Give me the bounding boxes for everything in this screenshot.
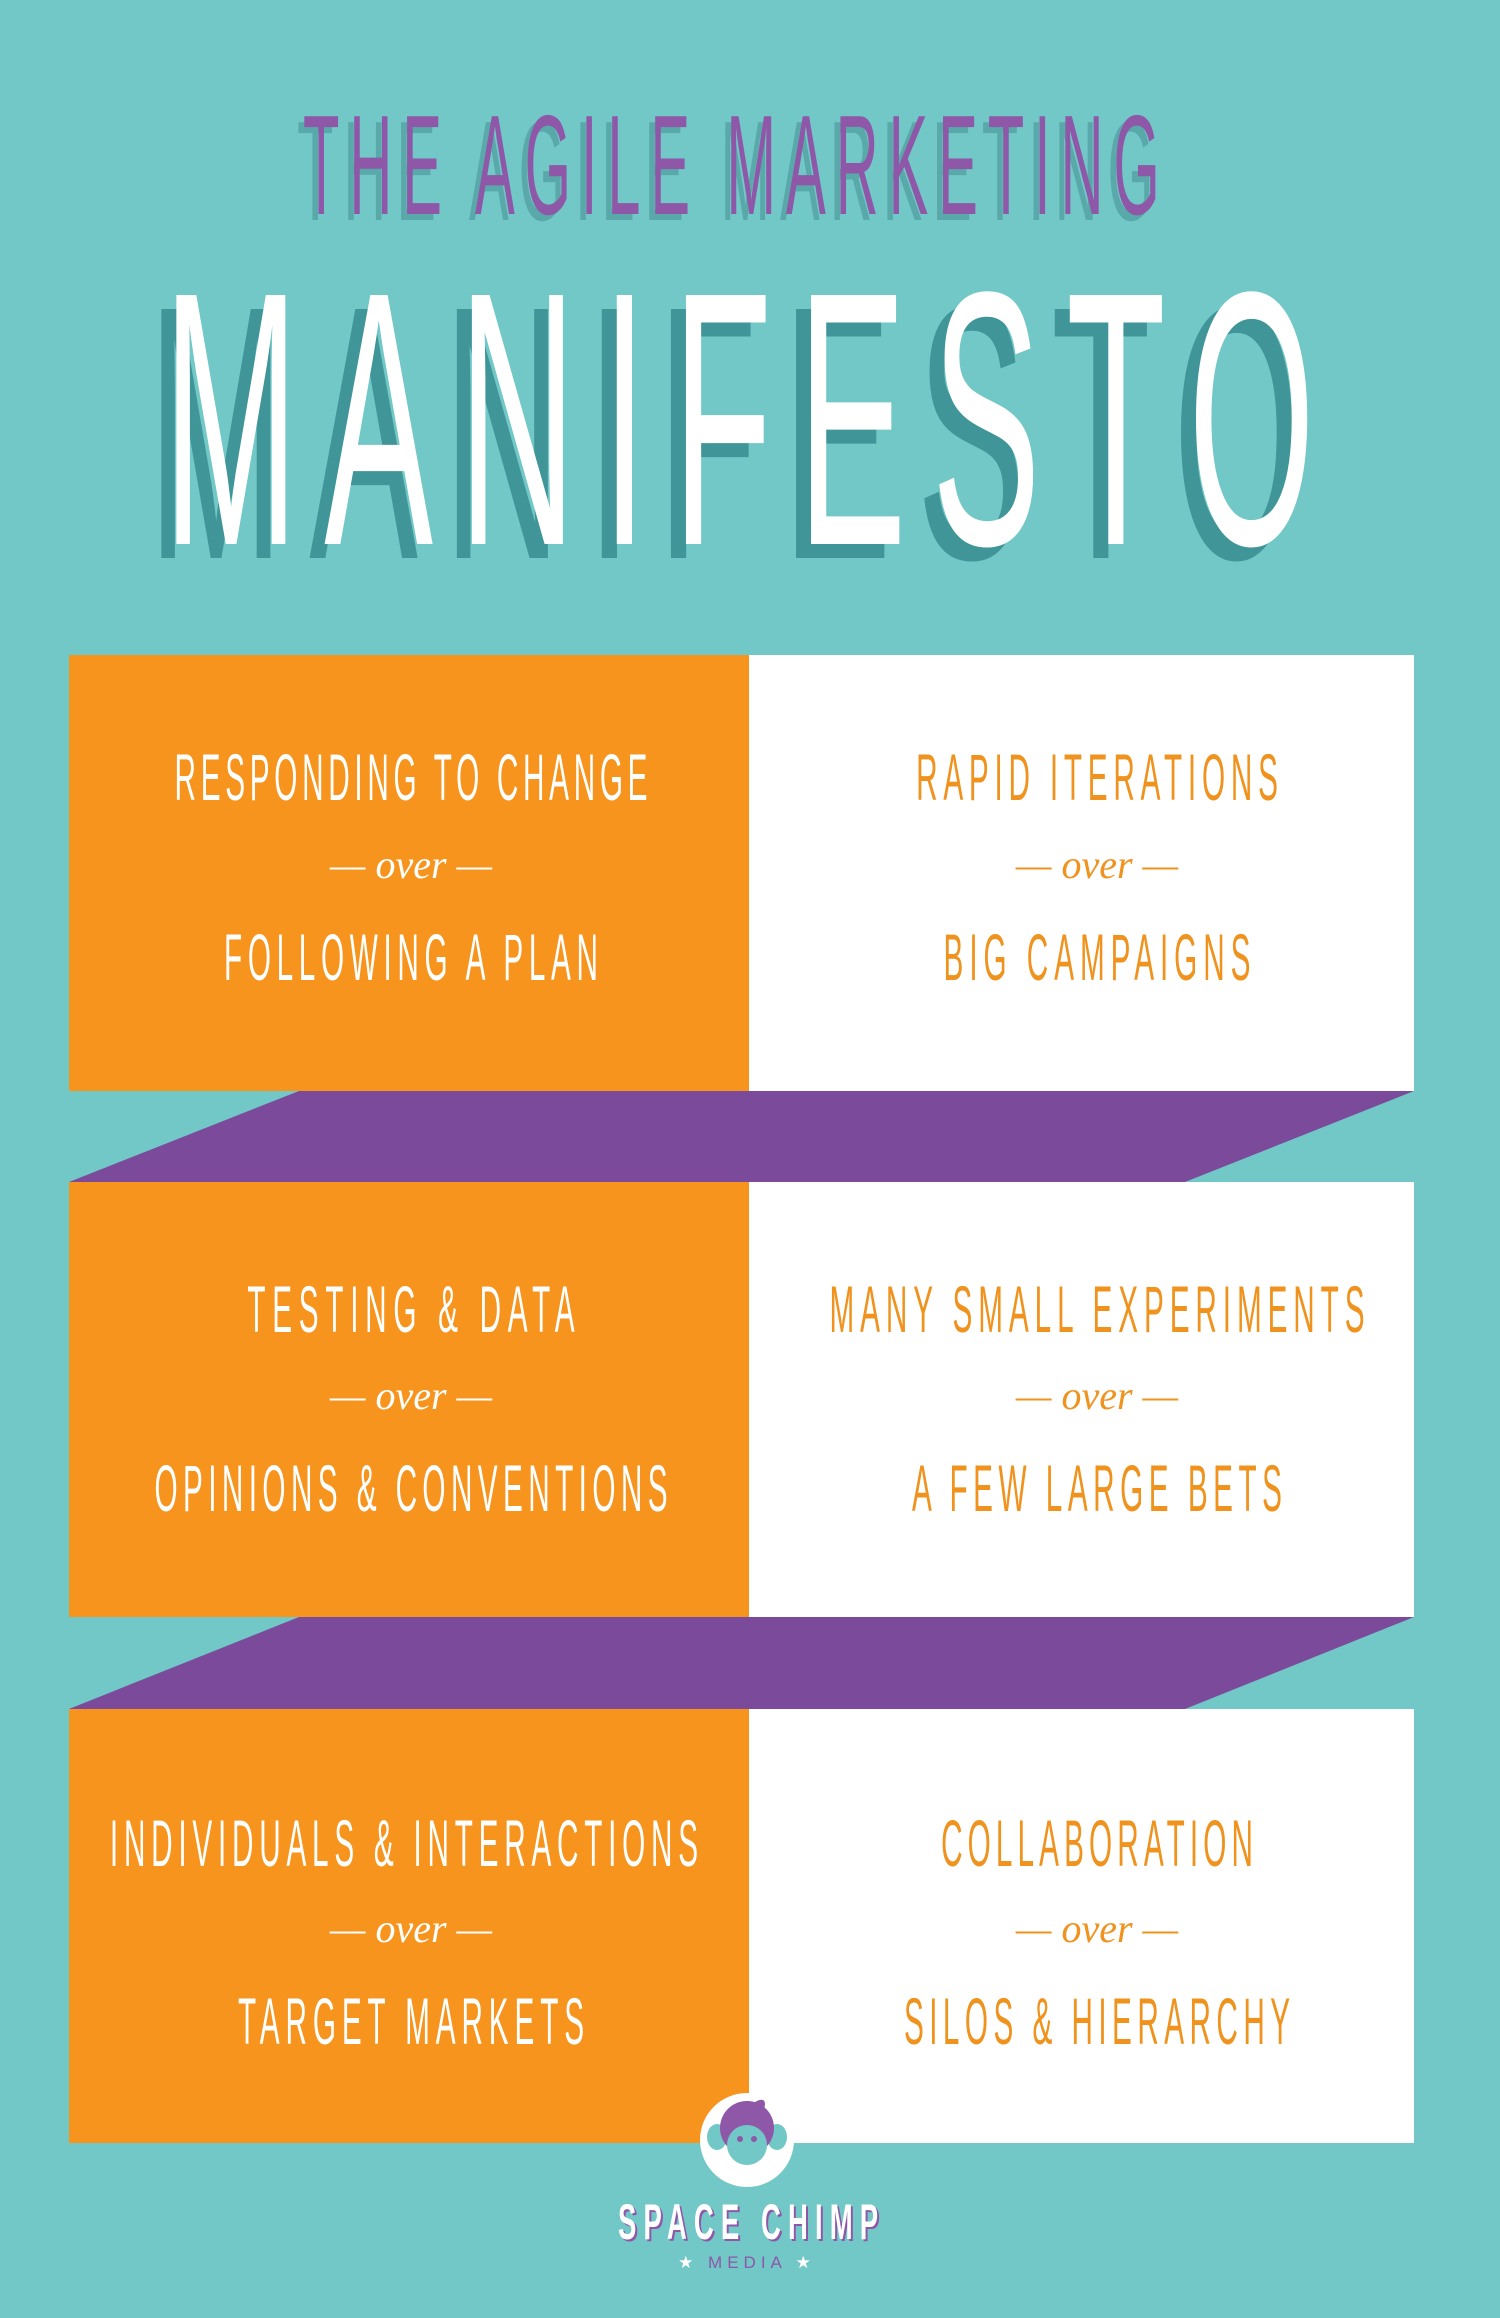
text: individuals & interactions over target markets: INDIVIDUALS & INTERACTIONS [110,1807,698,1880]
panel row 1 [69,655,1414,1091]
text: responding to change over following a plan: — over — [329,842,493,887]
text: many small experiments over a few large bets [829,1273,1365,1525]
text: collaboration over silos & hierarchy: COLLABORATION [941,1807,1253,1880]
text: responding to change over following a plan [175,741,647,994]
text: rapid iterations over big campaigns: RAPID ITERATIONS [916,741,1278,814]
text: media: ★ MEDIA ★ [678,2253,816,2272]
text: rapid iterations over big campaigns: BIG CAMPAIGNS [944,921,1250,994]
connector 1 [69,1091,1414,1182]
text: many small experiments over a few large bets: — over — [1015,1373,1179,1418]
text: testing & data over opinions & conventions: — over — [329,1373,493,1418]
title: the agile marketing: THE AGILE MARKETING [303,86,1160,245]
text: individuals & interactions over target markets [110,1807,698,2058]
text: many small experiments over a few large bets: A FEW LARGE BETS [912,1452,1282,1525]
text: responding to change over following a plan: FOLLOWING A PLAN [224,921,598,994]
title: the agile marketing: THE AGILE MARKETING [297,92,1154,251]
text: individuals & interactions over target markets: TARGET MARKETS [238,1985,584,2058]
panel row 3 [69,1709,1414,2143]
title: manifesto: MANIFESTO [148,232,1300,635]
text: space chimp: SPACE CHIMP [620,2195,880,2252]
title: manifesto: MANIFESTO [163,218,1315,621]
text: rapid iterations over big campaigns: — over — [1015,842,1179,887]
text: individuals & interactions over target markets: — over — [329,1906,493,1951]
text: collaboration over silos & hierarchy: — over — [1015,1906,1179,1951]
text: responding to change over following a plan: RESPONDING TO CHANGE [175,741,647,814]
logo: space chimp media [618,2093,880,2272]
text: testing & data over opinions & conventions: TESTING & DATA [247,1273,575,1346]
logo: space chimp media: SPACE CHIMP [618,2193,878,2250]
text: many small experiments over a few large bets: MANY SMALL EXPERIMENTS [829,1273,1365,1346]
connector 2 [69,1617,1414,1709]
icon: chimp badge [700,2093,794,2187]
text: rapid iterations over big campaigns [916,741,1278,994]
text: collaboration over silos & hierarchy: SILOS & HIERARCHY [904,1985,1290,2058]
panel row 2 [69,1182,1414,1617]
text: testing & data over opinions & conventions [154,1273,667,1525]
text: testing & data over opinions & conventions: OPINIONS & CONVENTIONS [154,1452,668,1525]
text: collaboration over silos & hierarchy [904,1807,1290,2058]
